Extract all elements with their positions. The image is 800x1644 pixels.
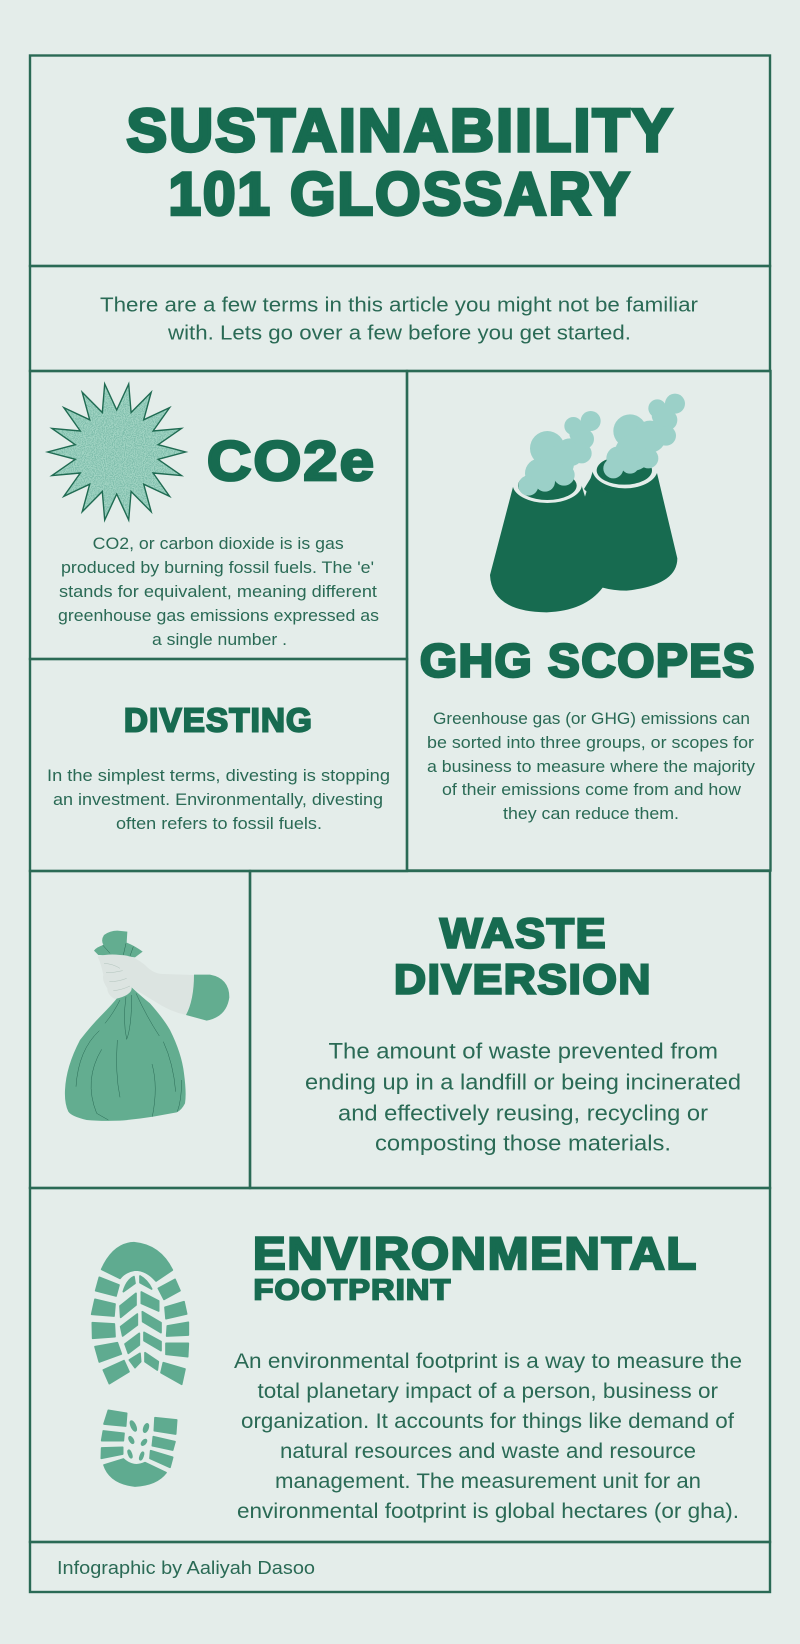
text: environmental footprint definition: An environmental footprint is a way to measure the bbox=[234, 1350, 742, 1373]
icon: boot print bbox=[92, 1243, 188, 1486]
panel: footer credit bbox=[30, 1542, 770, 1592]
icon: hand holding waste bag bbox=[65, 931, 229, 1121]
text: CO2e definition: CO2, or carbon dioxide is is gas bbox=[93, 535, 344, 553]
text: environmental footprint definition: management. The measurement unit for an bbox=[275, 1470, 701, 1493]
heading: waste diversion bbox=[394, 910, 652, 1002]
text: credit: Infographic by Aaliyah Dasoo bbox=[57, 1557, 315, 1578]
panel: introduction bbox=[30, 266, 770, 371]
text: GHG scopes definition: a business to measure where the majority bbox=[427, 758, 756, 776]
title bbox=[126, 97, 674, 228]
text: divesting definition bbox=[47, 766, 390, 833]
panel: CO2e bbox=[30, 371, 407, 659]
panel: GHG scopes bbox=[407, 371, 770, 870]
text: divesting definition: often refers to fossil fuels. bbox=[116, 814, 322, 833]
text: environmental footprint definition: natural resources and waste and resource bbox=[280, 1440, 696, 1463]
panel: bag image bbox=[30, 871, 250, 1188]
panel: divesting bbox=[30, 659, 407, 871]
text: CO2e definition: stands for equivalent, meaning different bbox=[59, 583, 377, 601]
text: CO2e definition: greenhouse gas emissions expressed as bbox=[58, 607, 379, 625]
text: GHG scopes definition: Greenhouse gas (or GHG) emissions can bbox=[433, 710, 750, 728]
heading: environmental footprint: ENVIRONMENTAL bbox=[253, 1228, 698, 1279]
text: GHG scopes definition: of their emissions come from and how bbox=[442, 781, 741, 799]
panel: waste diversion bbox=[250, 871, 770, 1188]
intro text: There are a few terms in this article you might not be familiar bbox=[100, 294, 698, 316]
icon: cooling towers with smoke bbox=[490, 394, 685, 612]
text: waste diversion definition: The amount of waste prevented from bbox=[328, 1038, 718, 1064]
intro text: with. Lets go over a few before you get started. bbox=[167, 322, 631, 344]
panel: title bbox=[30, 56, 770, 266]
text: GHG scopes definition bbox=[427, 710, 756, 823]
intro text bbox=[100, 294, 698, 344]
heading: divesting: DIVESTING bbox=[124, 702, 313, 738]
panel: environmental footprint bbox=[30, 1188, 770, 1542]
icon: spiky star bbox=[48, 384, 186, 520]
text: divesting definition: an investment. Environmentally, divesting bbox=[53, 790, 383, 809]
heading: waste diversion: DIVERSION bbox=[394, 956, 652, 1002]
text: environmental footprint definition: environmental footprint is global hectares (or gha). bbox=[237, 1500, 739, 1523]
text: GHG scopes definition: they can reduce them. bbox=[503, 805, 679, 823]
heading: environmental footprint bbox=[253, 1228, 698, 1306]
text: CO2e definition bbox=[58, 535, 379, 649]
title: 101 GLOSSARY bbox=[168, 160, 632, 228]
text: waste diversion definition: and effectively reusing, recycling or bbox=[338, 1100, 708, 1126]
text: CO2e definition: a single number . bbox=[152, 631, 287, 649]
text: environmental footprint definition bbox=[234, 1350, 742, 1523]
heading: environmental footprint: FOOTPRINT bbox=[254, 1274, 452, 1306]
text: divesting definition: In the simplest terms, divesting is stopping bbox=[47, 766, 390, 785]
text: CO2e definition: produced by burning fossil fuels. The 'e' bbox=[61, 559, 374, 577]
heading: waste diversion: WASTE bbox=[440, 910, 607, 956]
text: waste diversion definition bbox=[305, 1038, 741, 1156]
text: waste diversion definition: composting those materials. bbox=[375, 1130, 671, 1156]
text: environmental footprint definition: total planetary impact of a person, business or bbox=[258, 1380, 718, 1403]
heading: CO2e: CO2e bbox=[207, 429, 376, 492]
text: environmental footprint definition: organization. It accounts for things like demand of bbox=[241, 1410, 734, 1433]
text: GHG scopes definition: be sorted into three groups, or scopes for bbox=[427, 734, 755, 752]
text: waste diversion definition: ending up in a landfill or being incinerated bbox=[305, 1070, 741, 1094]
heading: GHG scopes: GHG SCOPES bbox=[420, 634, 756, 686]
title: SUSTAINABIILITY bbox=[126, 97, 674, 164]
